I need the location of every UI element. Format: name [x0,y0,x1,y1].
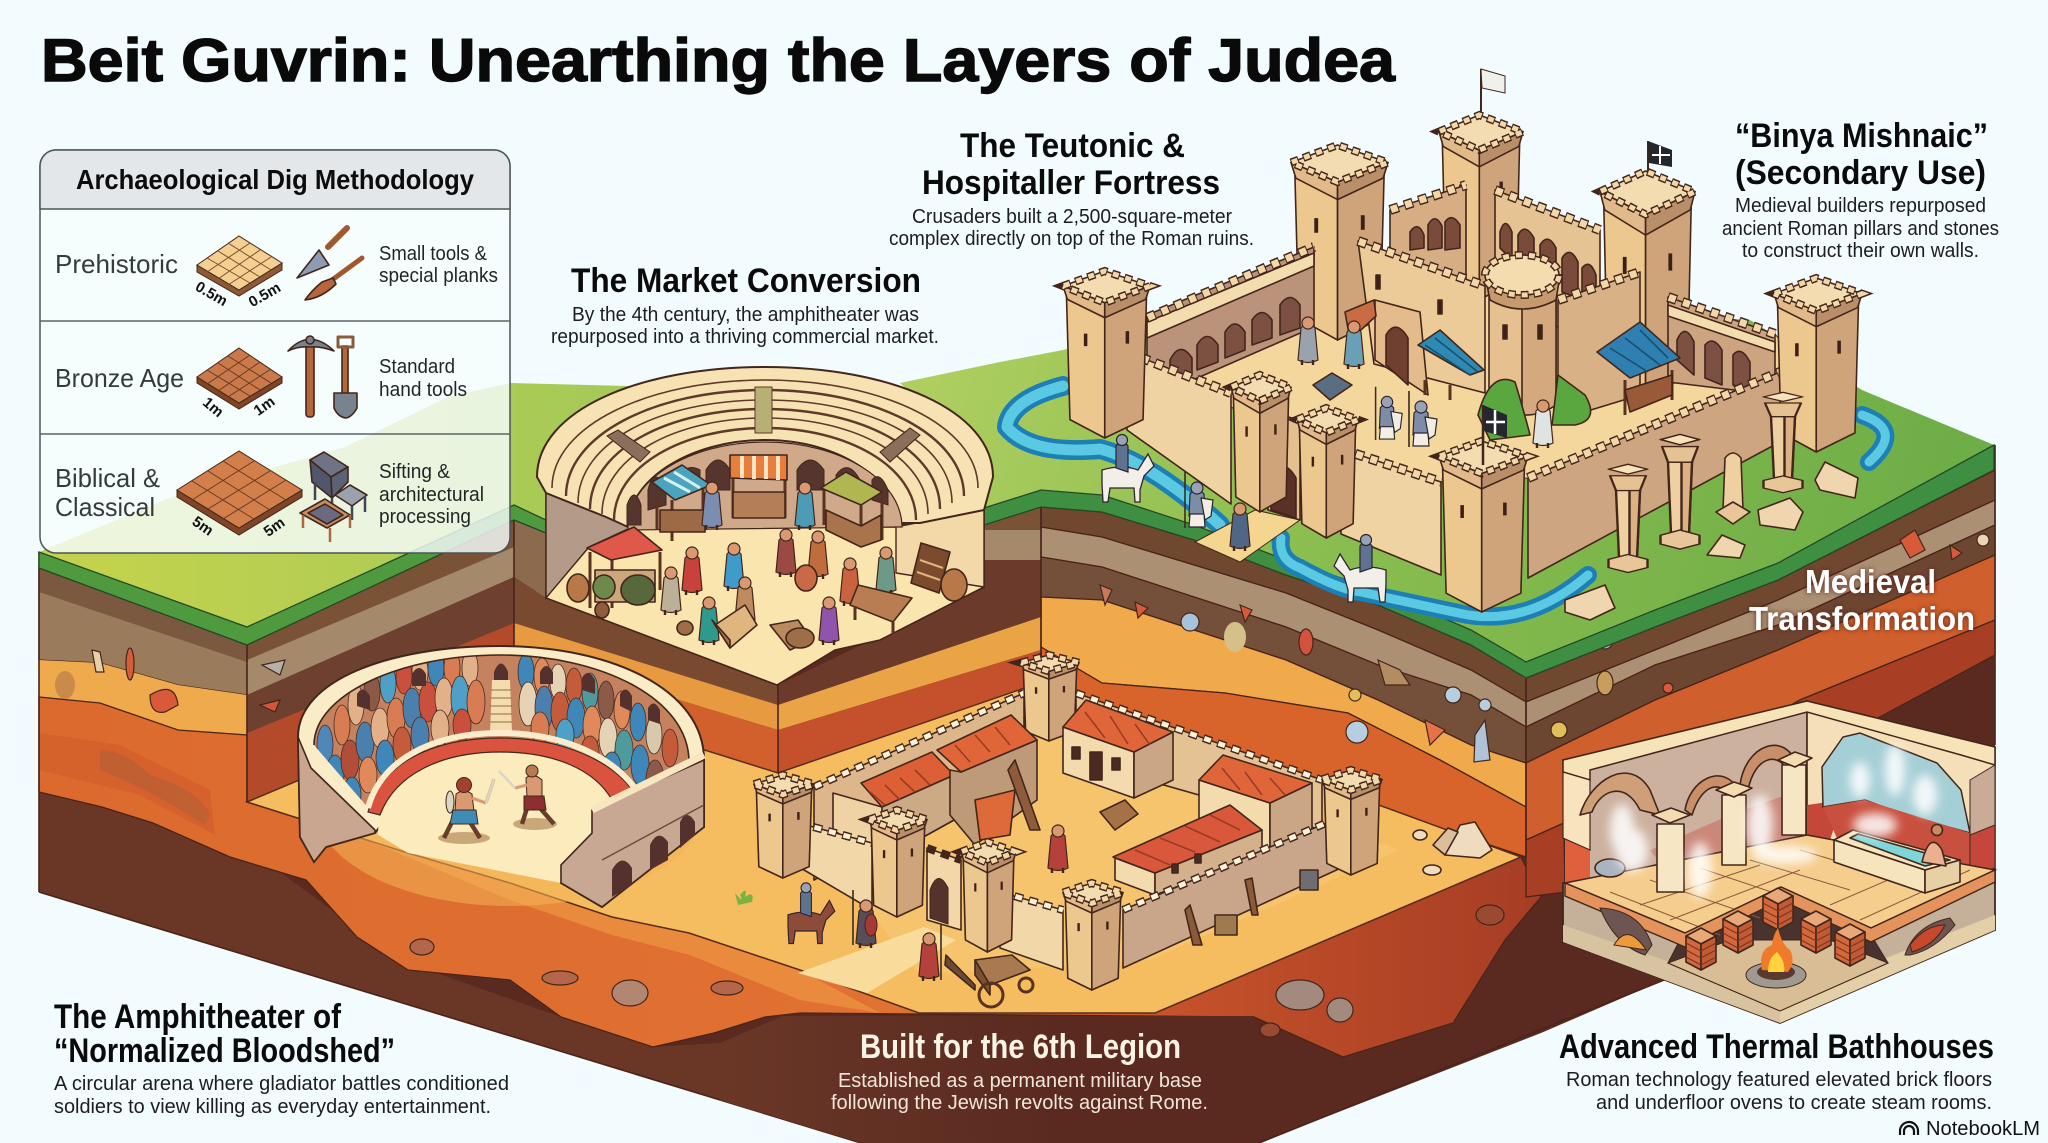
stand stairs [755,387,772,433]
awnings and stalls [1313,300,1680,440]
NotebookLM logo: NotebookLM [1926,1118,2040,1140]
market goods and crates [567,543,967,650]
window with sky [1822,733,1970,833]
table header: Archaeological Dig Methodology [76,164,474,195]
caption: 6th legion: Established as a permanent military base [838,1070,1202,1092]
caption: market: The Market Conversion [571,262,921,300]
caption: 6th legion: Built for the 6th Legion [860,1028,1181,1066]
tiled floor [1565,835,1995,947]
caption: secondary use: Medieval builders repurposed [1735,195,1986,217]
caption: secondary use [1722,117,1999,262]
caption: market: repurposed into a thriving commercial market. [551,326,939,348]
Roman legion camp [735,655,1492,1007]
row: bronze age: Standard [379,356,455,378]
cut wall right [561,755,704,907]
row: biblical and classical: Sifting & [379,461,451,483]
row: prehistoric: special planks [379,265,498,287]
caption: amphitheater: A circular arena where gladiator battles conditioned [54,1073,509,1095]
hypocaust cavity [1668,887,1888,1011]
row: biblical and classical: architectural [379,484,484,506]
market conversion amphitheater [537,367,993,685]
caption: fortress: The Teutonic & [960,127,1185,165]
pale clay smear [100,750,210,825]
caption: fortress [889,127,1254,250]
caption: secondary use: “Binya Mishnaic” [1735,117,1988,155]
row: bronze age [55,336,467,421]
red podium [368,738,632,815]
seams [39,445,1995,892]
row: biblical and classical: Classical [55,492,155,522]
dig methodology table [40,150,510,553]
top rim [1563,701,1995,780]
orange mid layer [39,697,1541,1057]
Roman pillars and reused stones [1565,392,1858,620]
caption: secondary use: ancient Roman pillars and stones [1722,218,1999,240]
caption: fortress: Crusaders built a 2,500-square-meter [912,206,1232,228]
inner keep [1358,241,1640,420]
outer back wall [298,646,704,907]
caption: amphitheater: The Amphitheater of [54,998,342,1036]
arches and pillars [1580,745,1812,892]
plunge pool with bather [1834,824,1960,893]
back left arcade wall [1147,247,1314,400]
camp towers [754,775,814,878]
cut wall left [298,737,375,862]
caption: amphitheater: “Normalized Bloodshed” [54,1032,395,1070]
caption: bathhouses: Roman technology featured elevated brick floors [1566,1069,1992,1091]
row: bronze age: 1m [251,393,278,419]
round keep tower [1485,255,1560,415]
row: biblical and classical: processing [379,506,471,528]
fire pit [1746,928,1806,988]
outer walls [1127,352,1802,578]
river [1007,386,1885,617]
legion text panel [720,1016,1254,1143]
bathhouse cutaway [1563,701,1995,1023]
table header [40,150,510,209]
tall towers [1291,145,1388,340]
row: biblical and classical: Biblical & [55,463,160,493]
row: bronze age: Bronze Age [55,363,184,393]
barracks [833,700,1312,895]
caption: 6th legion: following the Jewish revolts against Rome. [831,1092,1208,1114]
back wall arches [628,442,902,530]
caption: bathhouses: and underfloor ovens to create steam rooms. [1596,1092,1992,1114]
layer label: medieval transformation [1749,563,1975,637]
brick pillars [1686,888,1865,970]
row: prehistoric: 0.5m [246,279,284,311]
fortress [1063,69,1862,612]
row: prehistoric: Prehistoric [55,249,178,279]
gladiator amphitheater [298,646,705,907]
merchants and townspeople [661,482,896,645]
row: biblical and classical: 5m [189,513,216,539]
caption: secondary use: to construct their own walls. [1742,240,1979,262]
row: prehistoric: 0.5m [192,278,230,310]
steam clouds [1610,744,1937,898]
central tall tower with white flag [1439,69,1523,300]
left green surface [39,383,628,645]
caption: 6th legion [831,1028,1208,1114]
corner and gate towers [1063,271,1150,438]
soil layers: middle wall [778,507,1042,773]
caption: market: By the 4th century, the amphitheater was [572,304,919,326]
soil layers: right face [1526,470,1995,897]
floor [546,493,984,685]
riders, soldiers, wagon and rocks [735,822,1492,1007]
row: biblical and classical [55,451,484,542]
sand floor of the Roman level [247,682,1521,1013]
caption: amphitheater [54,998,509,1118]
arena floor [375,748,630,883]
caption: market [551,262,939,348]
courtyard knights [1298,317,1553,448]
stall: orange [730,455,787,518]
walls and dado [1563,701,1807,883]
back walls [814,693,1322,880]
row: prehistoric: Small tools & [379,243,488,265]
back right arcade wall [1668,297,1775,395]
mounted knights and foot soldiers outside [1102,434,1386,602]
stall: olive [821,472,882,547]
row: bronze age: hand tools [379,379,467,401]
inner upper walls with arches [1390,185,1600,345]
front walls [799,817,1343,970]
caption: bathhouses [1559,1028,1994,1114]
caption: secondary use: (Secondary Use) [1735,154,1986,192]
row: biblical and classical: 5m [261,514,288,540]
ovens [1600,908,1955,955]
gladiators [438,765,557,844]
stall: teal [652,465,711,541]
camp road [798,927,956,993]
layer label: medieval transformation: Medieval [1805,563,1936,600]
soil layers: back left wall [247,520,778,802]
layer label: medieval transformation: Transformation [1749,600,1975,637]
title: Beit Guvrin: Unearthing the Layers of Judea [41,27,1396,94]
row: bronze age: 1m [199,394,227,421]
ground plate and courtyard [1147,260,1799,482]
caption: amphitheater: soldiers to view killing as everyday entertainment. [54,1096,491,1118]
fortress green surface [900,290,1994,678]
buried stones and artifacts [55,530,1989,1037]
under-floor base [1563,870,1995,1023]
soil layers: front left face [39,568,247,735]
stall: red [587,527,662,608]
stands [537,367,993,527]
soil layers: fortress left face [1041,507,1526,857]
road to gate [1195,510,1300,562]
row: prehistoric [55,228,498,311]
caption: fortress: Hospitaller Fortress [922,164,1220,202]
back tower [1021,655,1079,741]
caption: fortress: complex directly on top of the Roman ruins. [889,228,1254,250]
terrain cutaway block [39,290,1995,1143]
